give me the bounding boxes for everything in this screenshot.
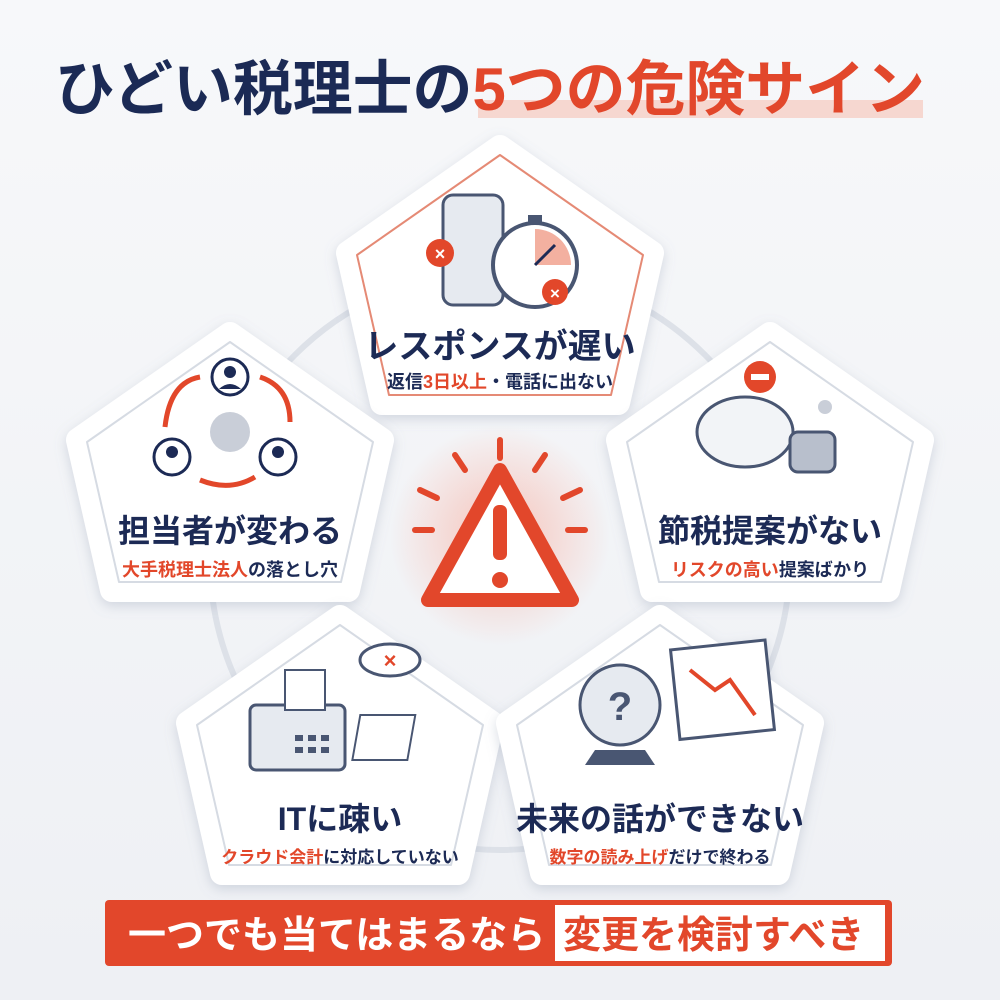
text: heading: 担当者が変わる bbox=[118, 513, 342, 549]
text: heading: 未来の話ができない bbox=[516, 801, 804, 837]
text: sub: 返信3日以上・電話に出ない bbox=[387, 372, 613, 392]
text: heading: ITに疎い bbox=[278, 801, 402, 837]
panel: response slow bbox=[348, 147, 652, 403]
text: sub: リスクの高い提案ばかり bbox=[671, 559, 869, 580]
warning icon bbox=[390, 425, 610, 645]
icon: phone and stopwatch: × bbox=[435, 244, 445, 264]
icon: phone and stopwatch bbox=[426, 195, 577, 307]
text: heading: 節税提案がない bbox=[658, 513, 882, 549]
panel: staff changes bbox=[78, 334, 382, 590]
icon: crystal ball and chart bbox=[580, 640, 774, 765]
icon: fax and cloud bbox=[250, 644, 420, 770]
text: sub: クラウド会計に対応していない bbox=[221, 848, 459, 867]
banner bbox=[105, 900, 892, 966]
icon: rotating people bbox=[154, 359, 296, 485]
icon: piggy bank bbox=[697, 361, 835, 472]
banner: 一つでも当てはまるなら bbox=[128, 915, 545, 957]
icon: fax and cloud: × bbox=[384, 648, 396, 673]
panel: no tax saving bbox=[618, 334, 922, 590]
panel: not IT savvy bbox=[188, 617, 492, 873]
icon: crystal ball and chart: ? bbox=[608, 685, 632, 729]
icon: phone and stopwatch: × bbox=[550, 284, 560, 303]
background ring bbox=[210, 270, 790, 850]
text: sub: 数字の読み上げだけで終わる bbox=[550, 848, 770, 867]
title: ひどい税理士の5つの危険サイン bbox=[55, 56, 925, 123]
text: sub: 大手税理士法人の落とし穴 bbox=[122, 560, 338, 580]
banner: 変更を検討すべき bbox=[563, 915, 864, 957]
text: heading: レスポンスが遅い bbox=[364, 327, 636, 366]
panel: no future talk bbox=[508, 617, 812, 873]
